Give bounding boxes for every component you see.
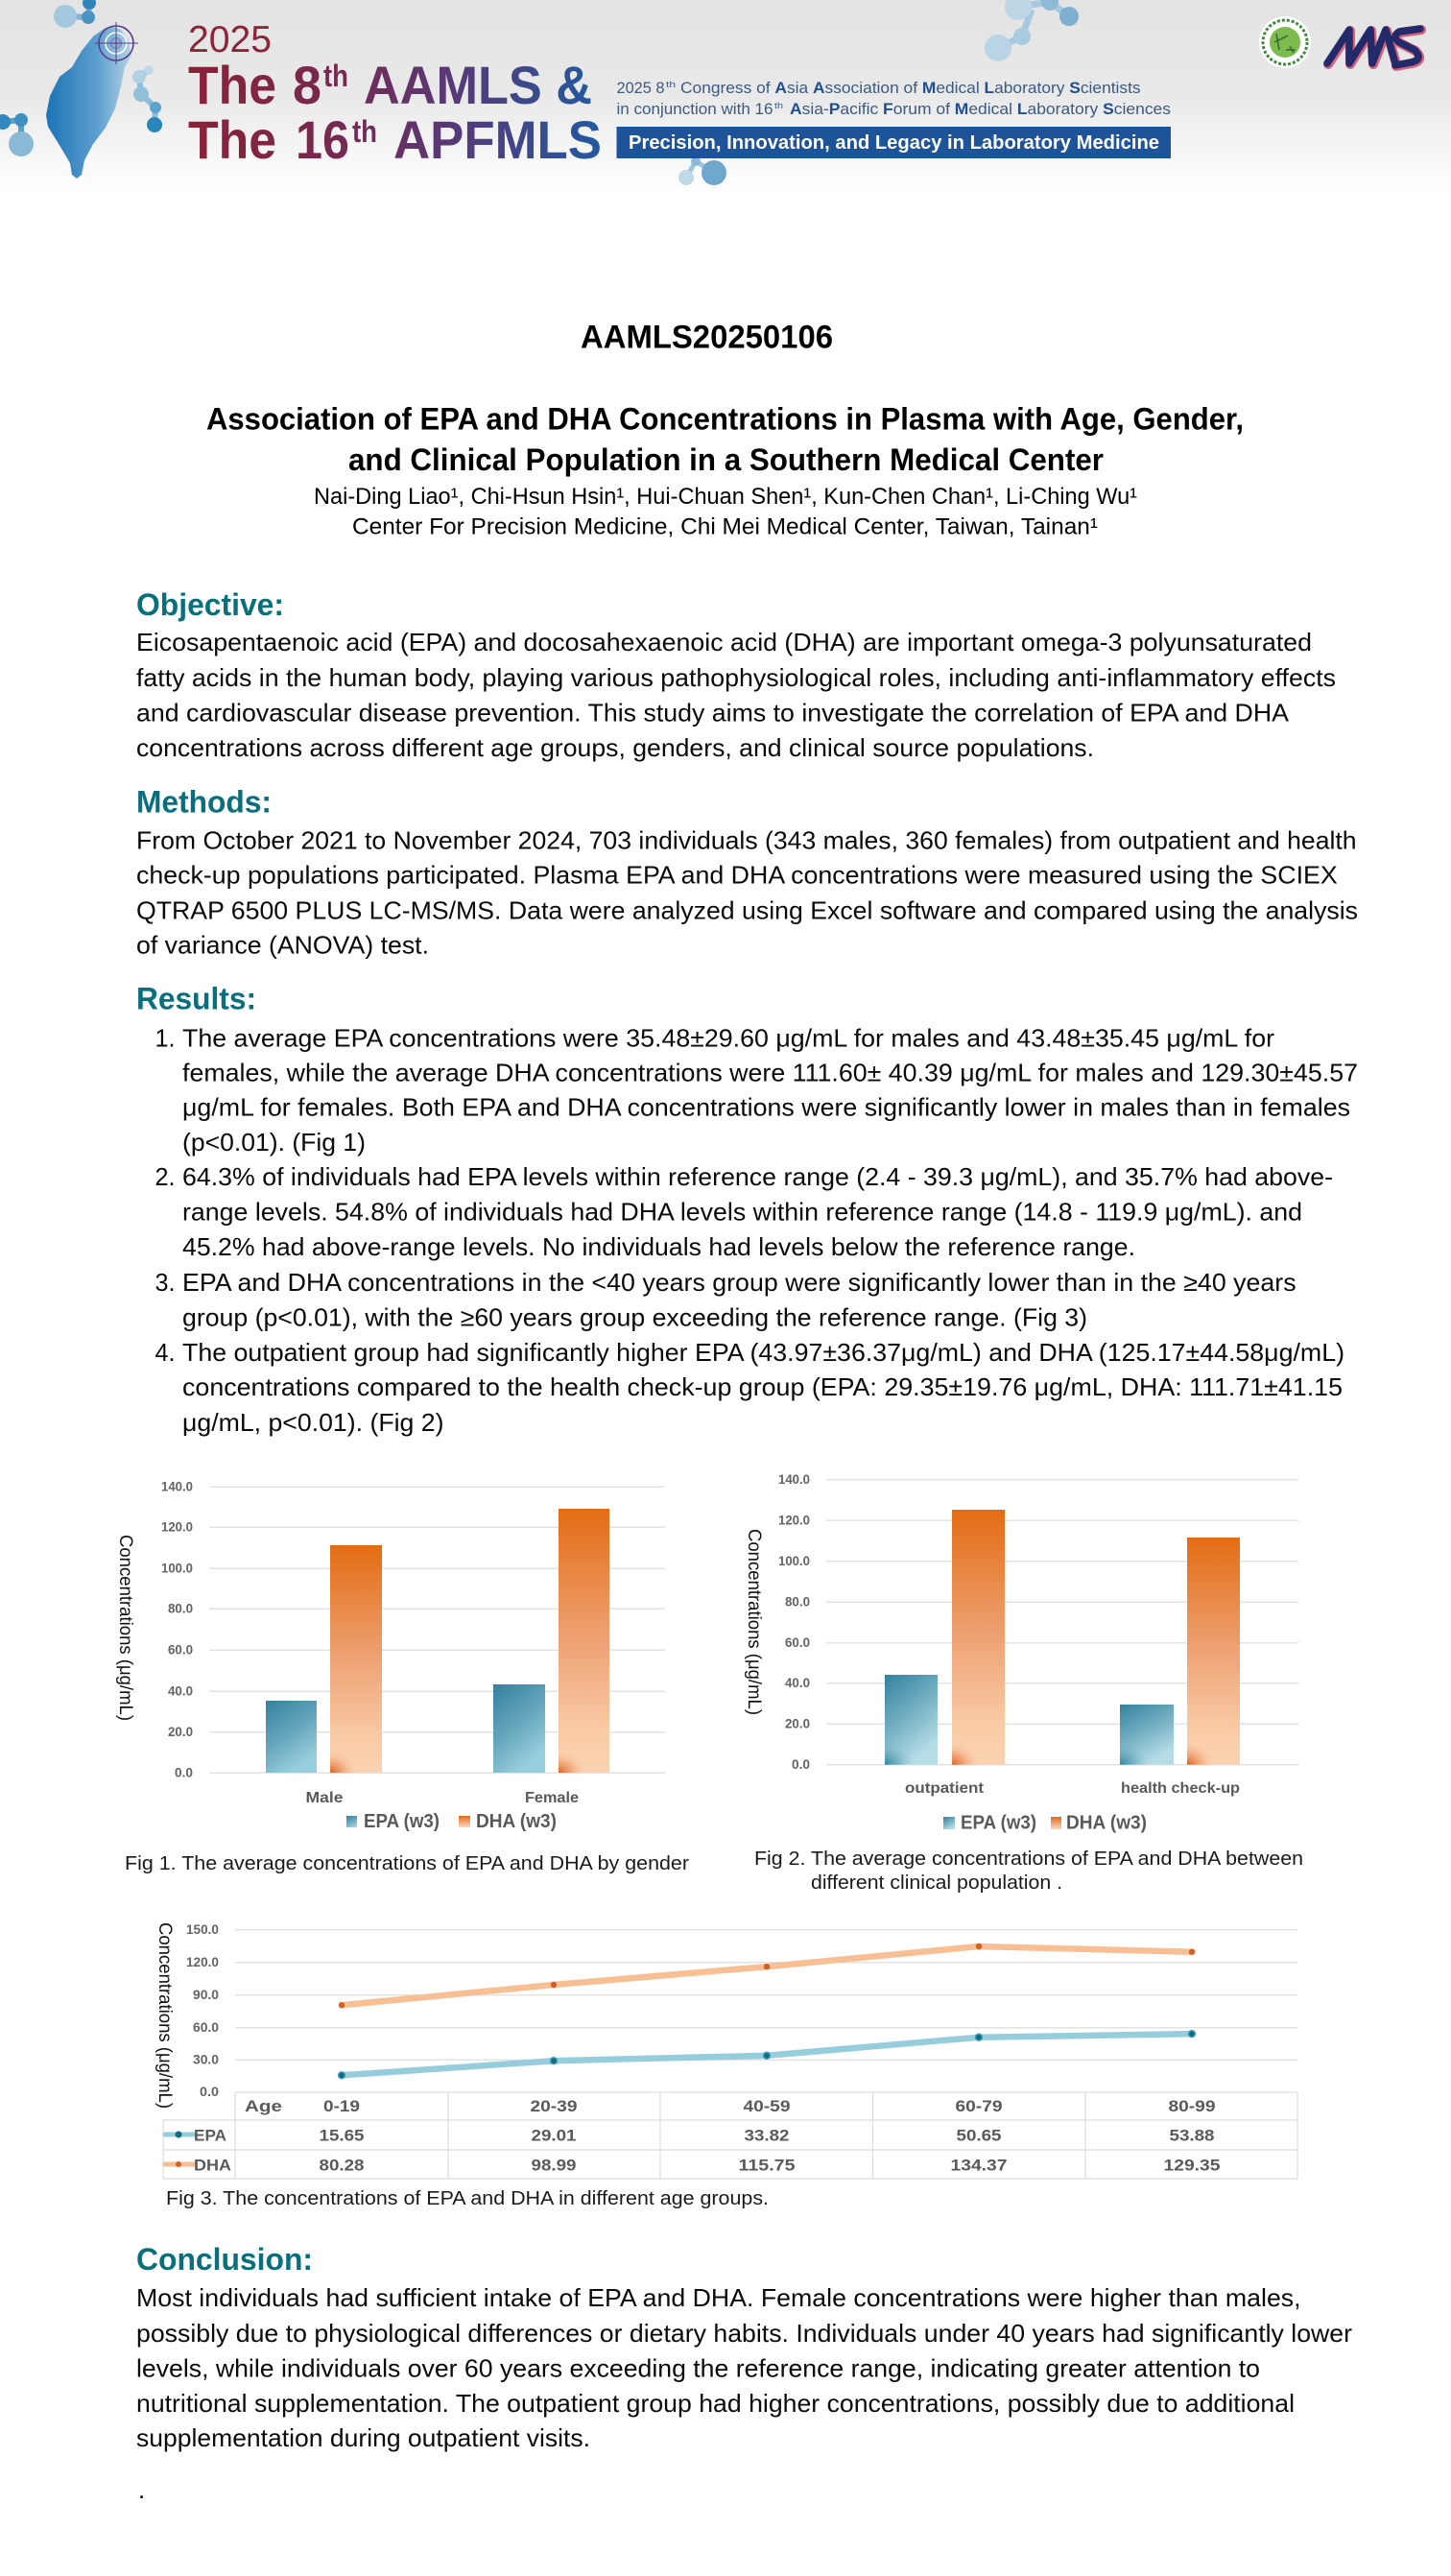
legend — [346, 1811, 557, 1832]
conclusion text: Most individuals had sufficient intake of EPA and DHA. Female concentrations were higher than males, — [136, 2283, 1301, 2312]
table header row: 60-79 — [956, 2097, 1002, 2115]
y axis ticks: 20.0 — [785, 1716, 810, 1731]
result item 1: The average EPA concentrations were 35.48±29.60 μg/mL for males and 43.48±35.45 μg/mL for — [182, 1024, 1274, 1053]
y axis ticks: 60.0 — [193, 2020, 219, 2035]
result item 1 — [155, 1024, 1358, 1157]
table row EPA: 53.88 — [1169, 2127, 1215, 2145]
table row EPA: 33.82 — [745, 2127, 789, 2145]
icon: target marker — [95, 22, 138, 64]
molecule: bottom centre — [678, 156, 726, 185]
series: EPA — [339, 2031, 1195, 2079]
y axis ticks: 100.0 — [161, 1561, 193, 1576]
y axis ticks — [778, 1472, 810, 1772]
table row DHA — [165, 2157, 1221, 2175]
result item 2: 2. — [155, 1162, 175, 1191]
congress description: Congress of Asia Association of Medical Laboratory Scientists — [680, 79, 1141, 97]
y axis ticks: 80.0 — [785, 1595, 810, 1609]
heading: methods: Methods: — [136, 785, 272, 820]
result item 1: μg/mL for females. Both EPA and DHA concentrations were significantly lower in males than in females — [182, 1093, 1350, 1122]
conference name: 16 — [296, 109, 349, 170]
result item 4: 4. — [155, 1338, 175, 1367]
y axis label: Concentrations (μg/mL) — [744, 1529, 765, 1715]
bar chart: Fig 2 clinical population — [744, 1472, 1298, 1834]
y axis ticks: 0.0 — [175, 1766, 193, 1779]
poster title: Association of EPA and DHA Concentrations in Plasma with Age, Gender, — [206, 402, 1244, 437]
molecule: right of island — [132, 65, 162, 132]
table header row: Age — [245, 2097, 282, 2115]
table row DHA: 134.37 — [950, 2157, 1008, 2175]
caption: Fig 2 — [754, 1849, 1303, 1894]
conference name — [188, 55, 602, 170]
conference year: 2025 — [188, 19, 272, 60]
molecule: top centre — [985, 0, 1079, 61]
objective text — [136, 628, 1336, 762]
result item 2: range levels. 54.8% of individuals had DHA levels within reference range (14.8 - 119.9 μg/mL). and — [182, 1198, 1302, 1227]
methods text: From October 2021 to November 2024, 703 individuals (343 males, 360 females) from outpatient and health — [136, 825, 1357, 854]
poster title — [206, 402, 1244, 477]
objective text: Eicosapentaenoic acid (EPA) and docosahexaenoic acid (DHA) are important omega-3 polyunsaturated — [136, 628, 1312, 656]
y axis ticks: 100.0 — [778, 1554, 810, 1568]
authors: Nai-Ding Liao¹, Chi-Hsun Hsin¹, Hui-Chuan Shen¹, Kun-Chen Chan¹, Li-Ching Wu¹ — [314, 484, 1137, 510]
y axis ticks: 140.0 — [778, 1472, 810, 1487]
caption: Fig 1: Fig 1. The average concentrations of EPA and DHA by gender — [125, 1853, 689, 1874]
table row DHA: DHA — [194, 2157, 231, 2175]
bars — [266, 1509, 609, 1773]
abstract id: AAMLS20250106 — [581, 319, 833, 355]
y axis ticks: 120.0 — [161, 1520, 193, 1534]
y axis ticks: 30.0 — [193, 2052, 219, 2067]
y axis ticks: 140.0 — [161, 1480, 193, 1493]
result item 4: The outpatient group had significantly higher EPA (43.97±36.37μg/mL) and DHA (125.17±44.58μg/mL) — [182, 1338, 1344, 1367]
theme banner: Precision, Innovation, and Legacy in Laboratory Medicine — [629, 132, 1159, 154]
congress description: Asia-Pacific Forum of Medical Laboratory Sciences — [790, 100, 1171, 118]
y axis ticks — [161, 1480, 193, 1779]
y axis ticks: 80.0 — [168, 1601, 193, 1616]
result item 2: 64.3% of individuals had EPA levels within reference range (2.4 - 39.3 μg/mL), and 35.7% had above- — [182, 1162, 1333, 1191]
section: objective — [136, 587, 1336, 762]
conference name: th — [352, 114, 377, 149]
result item 3: EPA and DHA concentrations in the <40 years group were significantly lower than in the ≥40 years — [182, 1268, 1296, 1297]
result item 4 — [155, 1338, 1344, 1437]
category labels — [905, 1780, 1240, 1797]
category labels: Female — [525, 1790, 579, 1806]
table row DHA: 98.99 — [532, 2157, 576, 2175]
table row DHA: 115.75 — [739, 2157, 795, 2175]
table header row: 80-99 — [1169, 2097, 1215, 2115]
conclusion text: . — [138, 2475, 145, 2504]
table header row: 40-59 — [743, 2097, 791, 2115]
bars — [885, 1510, 1240, 1765]
methods text: check-up populations participated. Plasma EPA and DHA concentrations were measured using the SCIEX — [136, 861, 1338, 890]
table row EPA: 50.65 — [956, 2127, 1002, 2145]
caption: Fig 3: Fig 3. The concentrations of EPA and DHA in different age groups. — [166, 2188, 769, 2209]
conclusion text: supplementation during outpatient visits. — [136, 2423, 590, 2452]
category labels — [305, 1790, 579, 1806]
table header row: 0-19 — [323, 2097, 360, 2115]
section: conclusion — [136, 2242, 1352, 2504]
y axis ticks: 0.0 — [200, 2085, 219, 2099]
result item 4: μg/mL, p<0.01). (Fig 2) — [182, 1408, 443, 1437]
table header row — [245, 2097, 1215, 2115]
table row EPA: EPA — [194, 2127, 226, 2145]
icon: society seal logo — [1259, 16, 1311, 68]
caption: Fig 2: different clinical population . — [811, 1872, 1062, 1894]
conference name: The — [188, 55, 276, 115]
line chart: Fig 3 age groups — [155, 1922, 1297, 2179]
legend: EPA (w3) — [961, 1813, 1036, 1834]
conference name: AAMLS & — [364, 55, 592, 115]
conclusion text — [136, 2283, 1352, 2504]
section: methods — [136, 785, 1358, 959]
legend: DHA (w3) — [1066, 1813, 1147, 1834]
legend: EPA (w3) — [364, 1811, 440, 1832]
y axis ticks: 60.0 — [785, 1635, 810, 1650]
series: DHA — [339, 1944, 1195, 2008]
y axis ticks: 0.0 — [792, 1757, 810, 1772]
conference name: 8 — [293, 55, 321, 115]
table row EPA — [165, 2127, 1215, 2145]
conference name: The — [188, 109, 276, 170]
result item 3 — [155, 1268, 1296, 1332]
category labels: Male — [305, 1790, 344, 1806]
bar chart: Fig 1 gender — [115, 1480, 665, 1832]
category labels: outpatient — [905, 1780, 985, 1797]
y axis ticks: 40.0 — [785, 1676, 810, 1690]
legend — [943, 1813, 1147, 1834]
conclusion text: nutritional supplementation. The outpatient group had higher concentrations, possibly due to additional — [136, 2389, 1295, 2418]
congress description: in conjunction with 16 — [616, 100, 773, 118]
conference name: APFMLS — [393, 109, 602, 170]
result item 4: concentrations compared to the health check-up group (EPA: 29.35±19.76 μg/mL, DHA: 111.71±41.15 — [182, 1372, 1343, 1401]
y axis ticks — [186, 1922, 219, 2099]
icon: Taiwan island map — [46, 26, 131, 179]
congress description — [616, 79, 1171, 118]
header banner — [0, 0, 1451, 192]
y axis label: Concentrations (μg/mL) — [155, 1922, 176, 2109]
y axis ticks: 20.0 — [168, 1725, 193, 1739]
poster title: and Clinical Population in a Southern Medical Center — [348, 442, 1104, 477]
icon: AAMLS logo mark — [1327, 29, 1421, 66]
result item 1: 1. — [155, 1024, 175, 1053]
molecule: top left — [54, 0, 96, 28]
table row EPA: 29.01 — [532, 2127, 576, 2145]
y axis ticks: 120.0 — [778, 1513, 810, 1528]
data table — [163, 2092, 1297, 2179]
y axis ticks: 40.0 — [168, 1683, 193, 1699]
congress description: 2025 8 — [616, 79, 664, 97]
y axis ticks: 60.0 — [168, 1643, 193, 1657]
conclusion text: levels, while individuals over 60 years exceeding the reference range, indicating greater attention to — [136, 2354, 1260, 2383]
y axis ticks: 90.0 — [193, 1988, 219, 2002]
result item 3: 3. — [155, 1268, 175, 1297]
result item 3: group (p<0.01), with the ≥60 years group exceeding the reference range. (Fig 3) — [182, 1303, 1087, 1332]
table header row: 20-39 — [530, 2097, 578, 2115]
y axis ticks: 120.0 — [186, 1955, 219, 1969]
objective text: fatty acids in the human body, playing various pathophysiological roles, including anti-inflammatory effects — [136, 663, 1336, 692]
congress description: th — [666, 80, 676, 89]
theme banner — [616, 127, 1171, 158]
heading: results: Results: — [136, 982, 256, 1016]
methods text: QTRAP 6500 PLUS LC-MS/MS. Data were analyzed using Excel software and compared using the analysis — [136, 895, 1358, 924]
heading: conclusion: Conclusion: — [136, 2242, 313, 2277]
conclusion text: possibly due to physiological differences or dietary habits. Individuals under 40 years had significantly lower — [136, 2319, 1352, 2348]
y axis ticks: 150.0 — [186, 1922, 219, 1937]
result item 1: (p<0.01). (Fig 1) — [182, 1128, 366, 1157]
objective text: and cardiovascular disease prevention. This study aims to investigate the correlation of EPA and DHA — [136, 699, 1290, 727]
molecule: left edge — [0, 113, 34, 156]
methods text: of variance (ANOVA) test. — [136, 930, 429, 959]
conference name: th — [323, 59, 348, 93]
table row DHA: 129.35 — [1163, 2157, 1221, 2175]
objective text: concentrations across different age groups, genders, and clinical source populations. — [136, 733, 1094, 762]
category labels: health check-up — [1121, 1780, 1240, 1797]
heading: objective: Objective: — [136, 587, 284, 622]
result item 1: females, while the average DHA concentrations were 111.60± 40.39 μg/mL for males and 129.30±45.57 — [182, 1059, 1358, 1087]
caption: Fig 2: Fig 2. The average concentrations of EPA and DHA between — [754, 1849, 1303, 1870]
result item 2 — [155, 1162, 1333, 1261]
section: results — [136, 982, 1358, 1437]
y axis label: Concentrations (μg/mL) — [115, 1535, 136, 1721]
congress description: th — [774, 101, 783, 110]
affiliation: Center For Precision Medicine, Chi Mei Medical Center, Taiwan, Tainan¹ — [352, 514, 1098, 540]
table row DHA: 80.28 — [319, 2157, 365, 2175]
legend: DHA (w3) — [476, 1811, 557, 1832]
methods text — [136, 825, 1358, 959]
result item 2: 45.2% had above-range levels. No individuals had levels below the reference range. — [182, 1232, 1135, 1261]
table row EPA: 15.65 — [319, 2127, 365, 2145]
